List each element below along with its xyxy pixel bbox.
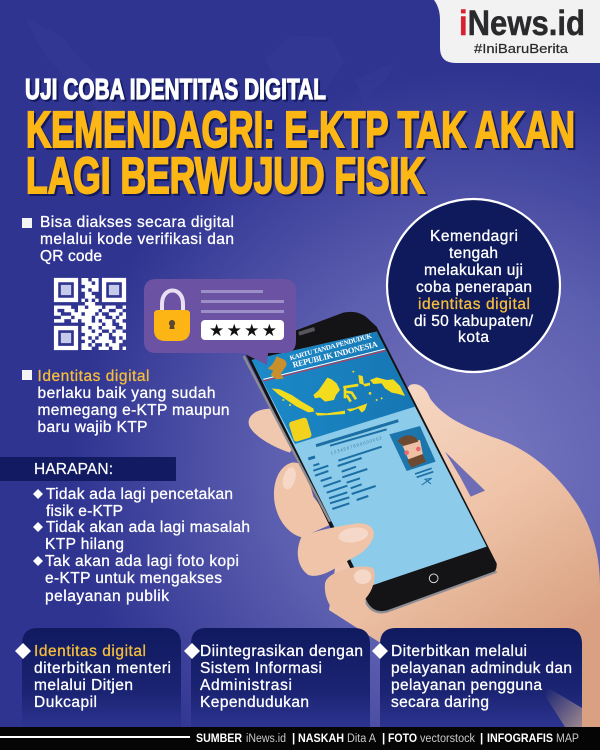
- logo tagline: #IniBaruBerita: [474, 41, 569, 56]
- middle finger: [274, 463, 333, 537]
- panel: card three: pelayanan pengguna: [391, 677, 542, 694]
- data lines: [308, 421, 433, 509]
- front finger one: [298, 523, 374, 576]
- circle callout: kota: [458, 329, 489, 346]
- circle callout: tengah: [449, 245, 498, 262]
- harapan list: Tak akan ada lagi foto kopi: [45, 553, 239, 570]
- panel: card two: [184, 628, 370, 727]
- bullet: identitas digital: baru wajib KTP: [38, 419, 148, 436]
- id number: 1234567890000002: [330, 435, 383, 456]
- harapan list: pelayanan publik: [45, 588, 169, 605]
- index finger: [249, 409, 300, 453]
- phone body: [244, 312, 497, 612]
- front finger two: [325, 567, 375, 622]
- person face: [402, 440, 423, 463]
- footer credits: SUMBER: [196, 733, 243, 745]
- harapan list: Tidak ada lagi pencetakan: [46, 486, 233, 503]
- logo iNews.id: [434, 0, 600, 63]
- panel: card one: Identitas digital: [34, 643, 146, 660]
- phone screen e-KTP: [252, 332, 487, 589]
- panel: card one: [15, 628, 181, 727]
- footer credits: MAP: [556, 733, 579, 745]
- circle callout: melakukan uji: [424, 262, 523, 279]
- garuda emblem: [267, 356, 287, 379]
- kicker: UJI COBA IDENTITAS DIGITAL: [25, 74, 326, 106]
- footer credits: |: [382, 733, 385, 745]
- sim chip: [288, 417, 312, 442]
- footer credits: Dita A: [347, 733, 376, 745]
- logo wordmark: iNews.id: [459, 4, 585, 43]
- footer credits: iNews.id: [246, 733, 286, 745]
- bullet: identitas digital: berlaku baik yang sudah: [38, 385, 216, 402]
- footer credits: INFOGRAFIS: [487, 733, 553, 745]
- panel: card one: melalui Ditjen: [34, 677, 133, 694]
- harapan list: fisik e-KTP: [46, 503, 123, 520]
- phone silver rim: [244, 356, 497, 612]
- card blue header area: [252, 332, 415, 444]
- panel: card two: Diintegrasikan dengan: [200, 643, 363, 660]
- headline line two: LAGI BERWUJUD FISIK: [28, 149, 427, 206]
- bullet: identitas digital: memegang e-KTP maupun: [38, 402, 230, 419]
- title: [25, 74, 577, 206]
- indonesia map: [272, 371, 405, 416]
- id photo: [389, 426, 436, 471]
- panel: card two: Kependudukan: [200, 694, 309, 711]
- harapan heading bar: HARAPAN:: [34, 461, 113, 478]
- password lines: [201, 290, 284, 313]
- icon: qr code: [54, 280, 126, 348]
- bullet: akses digital: QR code: [40, 248, 102, 265]
- bullet: akses digital: Bisa diakses secara digital: [40, 214, 234, 231]
- kicker: UJI COBA IDENTITAS DIGITAL: [27, 76, 328, 108]
- headline line two: [26, 147, 427, 206]
- headline line two: LAGI BERWUJUD FISIK: [26, 147, 425, 204]
- harapan list: [33, 486, 250, 605]
- footer credits: NASKAH: [298, 733, 344, 745]
- phone home button: [429, 574, 438, 583]
- footer credits: vectorstock: [420, 733, 475, 745]
- bullet: identitas digital: [22, 368, 230, 436]
- icon: padlock: [154, 290, 190, 341]
- panel: card three: pelayanan adminduk dan: [391, 660, 572, 677]
- panel: card three: Diterbitkan melalui: [391, 643, 527, 660]
- footer credits: [0, 727, 600, 750]
- card heading text: KARTU TANDA PENDUDUK: [289, 332, 373, 362]
- harapan list: e-KTP untuk mengakses: [45, 570, 222, 587]
- panel: card three: secara daring: [391, 694, 489, 711]
- panel: card two: Sistem Informasi: [200, 660, 322, 677]
- footer credits: FOTO: [388, 733, 417, 745]
- bullet: akses digital: [22, 214, 234, 265]
- harapan heading bar: [0, 457, 176, 481]
- password field: ★★★★: [209, 321, 277, 341]
- panel: card one: Dukcapil: [34, 694, 97, 711]
- hand palm and thumb: [329, 384, 600, 733]
- panel: card two: Administrasi: [200, 677, 292, 694]
- screen light card area: [252, 332, 487, 589]
- phone screen e-KTP: REPUBLIK INDONESIA: [292, 340, 379, 370]
- circle callout: di 50 kabupaten/: [414, 313, 534, 330]
- header stripe: [263, 349, 385, 379]
- bullet: identitas digital: Identitas digital: [38, 368, 150, 385]
- circle callout: Kemendagri: [430, 228, 518, 245]
- circle callout: identitas digital: [418, 296, 530, 313]
- phone speaker: [298, 327, 315, 336]
- panel: card three: [372, 628, 582, 727]
- hand and phone: [244, 312, 600, 733]
- finger nails: [281, 466, 371, 584]
- kicker: [25, 74, 328, 108]
- password bubble: [144, 279, 296, 365]
- panel: card one: diterbitkan menteri: [34, 660, 171, 677]
- circle callout: coba penerapan: [416, 279, 532, 296]
- circle callout: [387, 199, 560, 372]
- card three hand fade: [535, 680, 582, 727]
- gap between thumb and phone: [445, 452, 485, 497]
- footer credits: |: [480, 733, 483, 745]
- bullet: akses digital: melalui kode verifikasi dan: [40, 231, 234, 248]
- harapan list: KTP hilang: [45, 536, 124, 553]
- harapan list: Tidak akan ada lagi masalah: [46, 519, 250, 536]
- background map watermark: [25, 18, 600, 215]
- footer credits: |: [292, 733, 295, 745]
